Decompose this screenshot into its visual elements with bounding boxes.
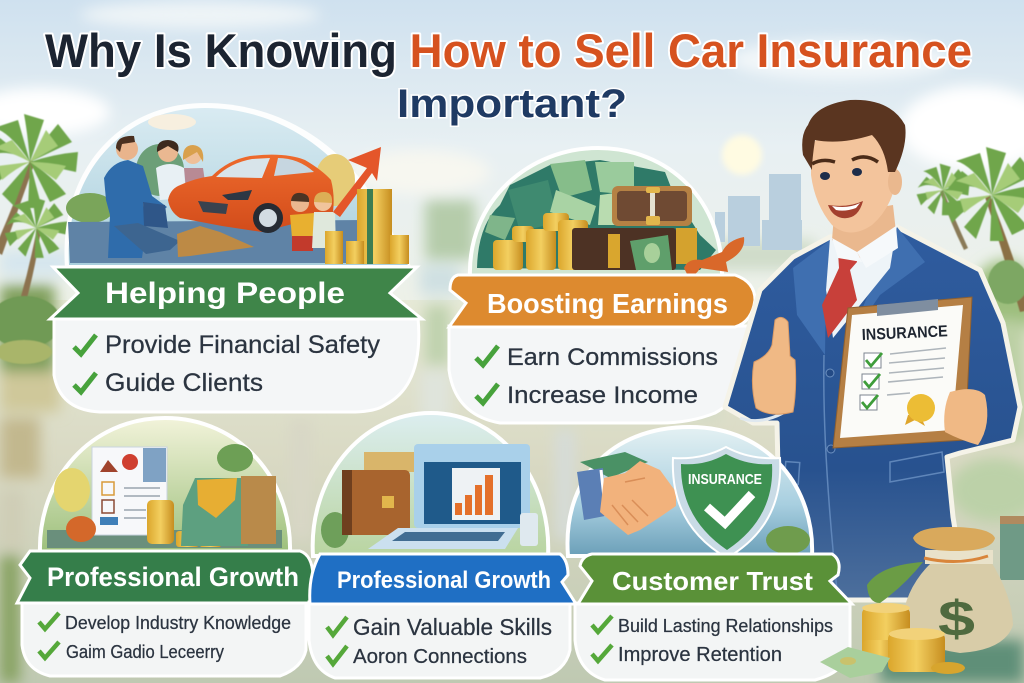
list item: Develop Industry Knowledge	[65, 613, 291, 633]
check icon	[74, 373, 96, 392]
teeth	[832, 203, 860, 211]
icon: cup	[520, 513, 538, 546]
icon: growth arrow	[333, 147, 381, 217]
icon: cash	[820, 647, 890, 678]
icon: chest and cash	[572, 228, 697, 270]
list item: Aoron Connections	[353, 646, 527, 668]
eyes	[820, 168, 862, 180]
icon: orange key	[684, 237, 744, 276]
shirt	[826, 225, 897, 338]
card: boosting earnings list	[449, 326, 748, 423]
clipboard	[833, 297, 972, 448]
face	[811, 128, 897, 232]
hair	[802, 100, 906, 172]
panel: salesman	[720, 0, 1020, 600]
list item: Gaim Gadio Leceerry	[66, 642, 224, 662]
check icon	[327, 617, 347, 635]
banner: customer trust	[578, 554, 852, 604]
banner: blue growth	[310, 554, 576, 604]
shield label: INSURANCE	[688, 471, 762, 488]
icon: leaves	[867, 562, 923, 603]
icon: orange car	[168, 155, 334, 233]
icon: children	[290, 192, 336, 251]
jacket details	[720, 0, 944, 600]
icon: briefcase	[342, 470, 410, 535]
icon: document	[92, 447, 167, 535]
lapels	[793, 227, 925, 355]
background: sky	[0, 0, 1024, 330]
panel: customer trust	[567, 427, 852, 680]
list item: Provide Financial Safety	[105, 331, 380, 359]
building: bottom right	[1000, 516, 1024, 580]
red tie	[822, 250, 857, 338]
neck	[832, 205, 896, 258]
check icon	[39, 642, 59, 658]
left sleeve cuff	[740, 413, 783, 421]
card: customer trust list	[575, 603, 850, 680]
checklist	[860, 348, 946, 410]
right hand	[944, 389, 987, 445]
icon: green bag and crate	[181, 476, 276, 546]
icon: handshake	[577, 452, 676, 535]
banner: helping people	[50, 267, 422, 319]
list item: Gain Valuable Skills	[353, 614, 552, 640]
icon: money bag: $	[938, 591, 975, 647]
illustration: helping people scene	[64, 103, 412, 268]
left hand: thumbs up	[752, 317, 796, 414]
suit jacket	[725, 227, 1020, 600]
gold seal	[905, 394, 935, 426]
city skyline	[715, 174, 802, 250]
check icon	[327, 646, 347, 664]
icon: insurance shield	[673, 447, 780, 558]
panel: professional growth blue	[309, 413, 576, 678]
card: green growth list	[22, 600, 306, 676]
panel: boosting earnings	[449, 148, 755, 423]
heading: Helping People	[105, 277, 345, 310]
icon: cash pile	[477, 160, 716, 270]
banner: boosting earnings	[449, 275, 755, 327]
check icon	[74, 335, 96, 354]
icon: orange fruit	[66, 516, 96, 542]
card: helping people list	[54, 318, 419, 412]
list item: Guide Clients	[105, 369, 263, 397]
palm trees: right	[917, 147, 1024, 312]
card: blue growth list	[309, 602, 570, 678]
illustration: briefcase and laptop	[313, 413, 548, 556]
illustration: handshake and shield	[567, 427, 812, 558]
illustration: documents and coins	[40, 418, 290, 552]
check icon	[39, 613, 59, 629]
clipboard label: INSURANCE	[861, 323, 948, 344]
icon: coins	[493, 213, 588, 270]
list item: Improve Retention	[618, 644, 782, 666]
check icon	[476, 346, 498, 365]
title line 1: Why Is Knowing How to Sell Car Insurance	[45, 24, 972, 77]
eyebrows	[812, 157, 878, 164]
buttons	[826, 369, 835, 453]
sun	[722, 135, 762, 175]
icon: coin stacks	[147, 500, 221, 547]
title line 2: Important?	[397, 82, 627, 126]
check icon	[592, 616, 612, 632]
icon: family	[104, 136, 205, 258]
check mark	[707, 494, 752, 523]
illustration: money and wallet	[470, 148, 744, 278]
heading: Boosting Earnings	[487, 288, 728, 319]
icon: money bag	[903, 527, 1013, 653]
panel: helping people	[50, 103, 422, 412]
background: landscape	[0, 300, 1024, 683]
ear	[888, 169, 902, 195]
icon: plant	[766, 526, 810, 554]
icon: gold coins	[862, 603, 965, 674]
list item: Build Lasting Relationships	[618, 616, 833, 636]
icon: coin stacks	[325, 189, 409, 264]
title	[45, 24, 972, 126]
panel: professional growth green	[17, 418, 313, 676]
heading: Professional Growth	[47, 562, 299, 592]
banner: green growth	[17, 551, 313, 603]
icon: books	[364, 452, 416, 472]
heading: Customer Trust	[612, 566, 813, 596]
icon: laptop with chart	[368, 444, 530, 549]
list item: Earn Commissions	[507, 344, 718, 371]
check icon	[592, 645, 612, 661]
list item: Increase Income	[507, 382, 698, 409]
check icon	[476, 384, 498, 403]
icon: wallet	[612, 186, 692, 226]
icon: toolbox and cloth	[114, 202, 254, 257]
shirt collar	[832, 226, 898, 268]
palm trees: left	[0, 114, 78, 364]
heading: Professional Growth	[337, 567, 551, 594]
mouth	[828, 201, 863, 218]
